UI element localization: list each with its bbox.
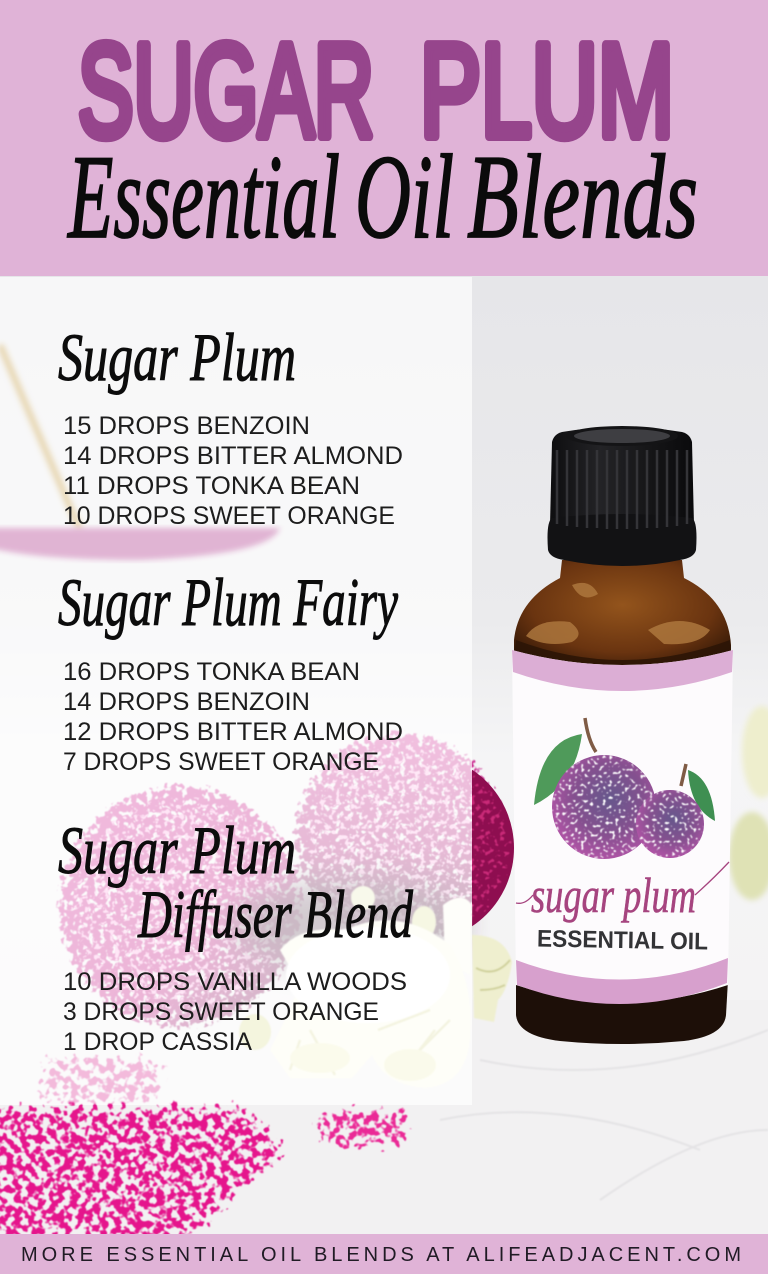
footer band bbox=[0, 1234, 768, 1274]
blend 1 ingredients: 11 DROPS TONKA BEAN bbox=[63, 472, 360, 500]
blend 1 ingredients: 10 DROPS SWEET ORANGE bbox=[63, 502, 395, 530]
spilled glitter under panel bbox=[35, 1052, 168, 1110]
dark glitter sphere behind bottle bbox=[472, 770, 514, 926]
white label bbox=[512, 650, 733, 1002]
label text: essential oil: ESSENTIAL OIL bbox=[537, 926, 708, 955]
shadow between spheres bbox=[230, 883, 460, 967]
right leaf bbox=[688, 770, 715, 821]
blurred gold stick bbox=[0, 345, 80, 530]
stems bbox=[585, 718, 686, 786]
label pink bottom band bbox=[516, 958, 728, 1004]
label script: sugar plum: sugar plum bbox=[531, 867, 696, 923]
blend 2 ingredients: 14 DROPS BENZOIN bbox=[63, 688, 310, 716]
blend 3 ingredients bbox=[63, 968, 407, 1056]
blend 3 ingredients: 1 DROP CASSIA bbox=[63, 1028, 252, 1056]
label pink top band bbox=[512, 650, 733, 691]
small plum bbox=[636, 790, 704, 858]
blend 3 ingredients: 3 DROPS SWEET ORANGE bbox=[63, 998, 379, 1026]
subtitle: Essential Oil Blends: Essential bbox=[67, 130, 340, 263]
cream flowers right bbox=[729, 706, 768, 900]
blend: Sugar Plum Diffuser Blend bbox=[58, 812, 414, 1056]
blend 2 ingredients: 7 DROPS SWEET ORANGE bbox=[63, 748, 379, 776]
large plum bbox=[552, 755, 656, 859]
blend 2 ingredients: 16 DROPS TONKA BEAN bbox=[63, 658, 360, 686]
left leaf bbox=[534, 734, 582, 805]
blend 1 ingredients: 15 DROPS BENZOIN bbox=[63, 412, 310, 440]
essential oil bottle bbox=[512, 426, 733, 1044]
amber glass shoulders bbox=[514, 560, 731, 672]
subtitle: Essential Oil Blends: Oil bbox=[355, 130, 454, 263]
spilled pink glitter bbox=[0, 1100, 412, 1245]
bottle base bbox=[516, 980, 728, 1044]
black ribbed cap bbox=[548, 426, 696, 566]
cream flowers center bbox=[239, 886, 512, 1088]
blurred pink bowl bbox=[0, 528, 280, 560]
blend heading 3: Sugar Plum bbox=[58, 812, 296, 888]
title: Sugar Plum: SUGAR bbox=[78, 17, 374, 164]
blend 1 ingredients bbox=[63, 412, 403, 530]
blend 1 ingredients: 14 DROPS BITTER ALMOND bbox=[63, 442, 403, 470]
blend heading 3: Diffuser Blend bbox=[137, 876, 414, 952]
blend 2 ingredients bbox=[63, 658, 403, 776]
blend: Sugar Plum bbox=[58, 319, 403, 530]
glass highlights bbox=[526, 583, 710, 644]
blend heading 2: Sugar Plum Fairy bbox=[58, 564, 399, 640]
blend: Sugar Plum Fairy bbox=[58, 564, 403, 776]
translucent text panel bbox=[0, 277, 472, 1105]
blend heading 1: Sugar Plum bbox=[58, 319, 296, 395]
blend 2 ingredients: 12 DROPS BITTER ALMOND bbox=[63, 718, 403, 746]
header band bbox=[0, 0, 768, 276]
plum illustration bbox=[534, 718, 715, 859]
subtitle: Essential Oil Blends bbox=[67, 130, 698, 263]
blend 3 ingredients: 10 DROPS VANILLA WOODS bbox=[63, 968, 407, 996]
blend heading 3 bbox=[58, 812, 414, 952]
background photo bbox=[0, 276, 768, 1236]
glitter sphere left bbox=[56, 782, 304, 1030]
glitter sphere right bbox=[292, 730, 508, 946]
dark glass line above label bbox=[514, 640, 731, 672]
footer text: MORE ESSENTIAL OIL BLENDS AT ALIFEADJACENT.COM bbox=[21, 1244, 741, 1266]
